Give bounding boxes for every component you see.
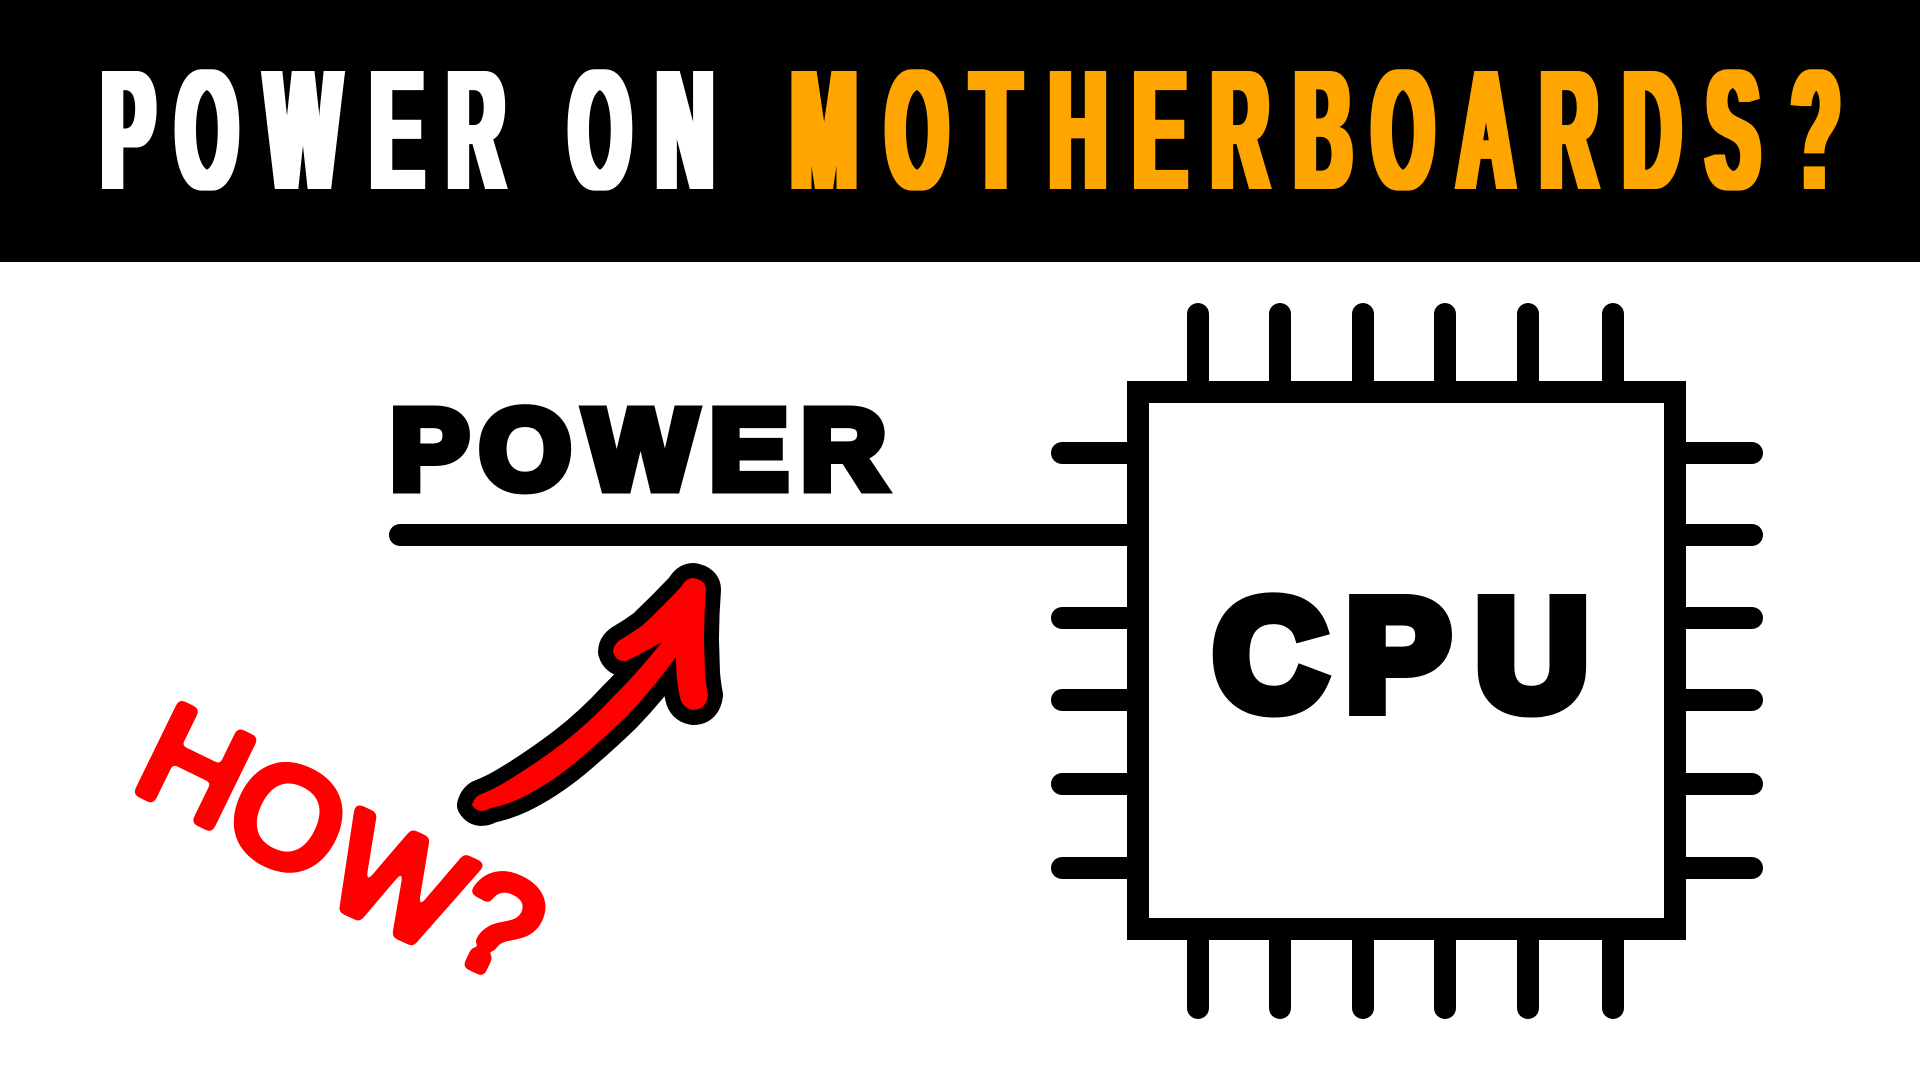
left pins — [1062, 453, 1140, 868]
arrow fill — [472, 578, 708, 811]
title banner — [0, 0, 1920, 262]
power label: POWER — [390, 388, 886, 513]
title text: MOTHERBOARDS? — [791, 35, 1840, 226]
arrow pointing at power line — [472, 578, 708, 811]
cpu chip — [1062, 314, 1752, 1008]
bottom pins — [1198, 930, 1613, 1008]
right pins — [1675, 453, 1752, 868]
cpu label: CPU — [1213, 568, 1589, 743]
chip body — [1138, 392, 1675, 929]
how? handwritten label: HOW? — [116, 673, 566, 1012]
top pins — [1198, 314, 1613, 392]
title text: POWER ON — [102, 35, 761, 226]
power line — [400, 524, 1140, 546]
title text — [102, 35, 1840, 226]
